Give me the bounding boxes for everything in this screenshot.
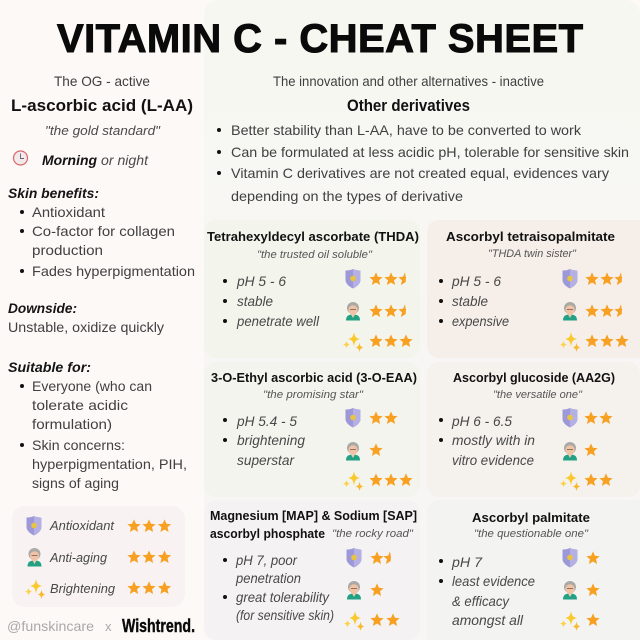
legend: Antioxidant <box>49 519 115 533</box>
text: morning or night: or night <box>101 152 149 168</box>
panel background: other derivatives <box>204 0 640 640</box>
card: ascorbyl tetraisopalmitate: Ascorbyl tetraisopalmitate <box>446 230 615 244</box>
card: AA2G: vitro evidence <box>452 452 534 468</box>
card: THDA: penetrate well <box>236 313 320 329</box>
card: MAP and SAP: ascorbyl phosphate <box>210 527 325 541</box>
list: skin benefits: Fades hyperpigmentation <box>32 263 195 279</box>
card: MAP and SAP: penetration <box>235 570 301 586</box>
list: derivatives overview: Better stability than L-AA, have to be converted to work <box>231 122 582 138</box>
card: ascorbyl tetraisopalmitate: pH 5 - 6 <box>451 273 501 289</box>
card: ascorbyl palmitate: & efficacy <box>452 593 510 609</box>
card: THDA: pH 5 - 6 <box>236 273 286 289</box>
list: derivatives overview: Can be formulated at less acidic pH, tolerable for sensitive skin <box>231 144 629 160</box>
card: ascorbyl palmitate: least evidence <box>452 573 535 589</box>
list: suitable for: signs of aging <box>32 475 119 491</box>
credit: Wishtrend. <box>122 616 195 636</box>
credit: x <box>105 619 112 634</box>
card: AA2G: pH 6 - 6.5 <box>451 413 512 429</box>
card: 3-O-EAA: "the promising star" <box>263 389 364 401</box>
panel: L-ascorbic acid <box>7 73 195 636</box>
card: MAP and SAP <box>204 500 420 640</box>
card: 3-O-EAA: 3-O-Ethyl ascorbic acid (3-O-EAA) <box>211 371 417 385</box>
credit: @funskincare <box>7 618 94 634</box>
card: THDA <box>204 220 420 358</box>
card: ascorbyl palmitate: Ascorbyl palmitate <box>472 511 590 525</box>
icon: clock <box>14 151 28 165</box>
card: ascorbyl tetraisopalmitate <box>427 220 640 358</box>
list: suitable for: formulation) <box>32 416 112 432</box>
heading: suitable for: Suitable for: <box>8 359 91 375</box>
card: ascorbyl palmitate: amongst all <box>452 612 524 628</box>
heading: skin benefits: Skin benefits: <box>8 185 99 201</box>
card: MAP and SAP: Magnesium [MAP] & Sodium [SAP] <box>210 509 417 523</box>
title: VITAMIN C - CHEAT SHEET <box>57 17 583 61</box>
card: MAP and SAP: pH 7, poor <box>235 552 298 568</box>
legend: Brightening <box>50 582 115 596</box>
intro: other derivatives <box>217 73 629 204</box>
list: derivatives overview: depending on the types of derivative <box>231 188 463 204</box>
card: 3-O-EAA: pH 5.4 - 5 <box>236 413 297 429</box>
card: ascorbyl tetraisopalmitate: expensive <box>452 313 509 329</box>
heading: downside: Downside: <box>8 300 77 316</box>
card: AA2G: Ascorbyl glucoside (AA2G) <box>453 371 615 385</box>
legend <box>12 506 185 607</box>
card: AA2G: mostly with in <box>452 432 535 448</box>
text: morning or night: Morning <box>42 152 97 168</box>
card: MAP and SAP: "the rocky road" <box>332 528 414 540</box>
card: ascorbyl tetraisopalmitate: stable <box>452 293 488 309</box>
list: derivatives overview <box>217 122 629 204</box>
list: suitable for: hyperpigmentation, PIH, <box>32 456 187 472</box>
card: ascorbyl palmitate: "the questionable one" <box>474 528 589 540</box>
text: morning or night <box>42 152 149 168</box>
text: downside: Unstable, oxidize quickly <box>8 319 164 335</box>
legend: Anti-aging <box>49 551 107 565</box>
card: AA2G <box>427 362 640 497</box>
list: suitable for: Skin concerns: <box>32 437 125 453</box>
card: 3-O-EAA: brightening <box>237 432 305 448</box>
list: suitable for: Everyone (who can <box>32 378 152 394</box>
credit <box>7 616 195 636</box>
list: skin benefits <box>20 204 195 279</box>
quote: gold standard: "the gold standard" <box>45 124 161 138</box>
card: THDA: Tetrahexyldecyl ascorbate (THDA) <box>207 230 419 244</box>
list: skin benefits: production <box>32 242 103 258</box>
card: ascorbyl palmitate: pH 7 <box>451 554 483 570</box>
list: derivatives overview: Vitamin C derivatives are not created equal, evidences vary <box>231 165 609 181</box>
list: skin benefits: Co-factor for collagen <box>32 223 175 239</box>
card: 3-O-EAA: superstar <box>237 452 295 468</box>
list: skin benefits: Antioxidant <box>32 204 105 220</box>
heading: other derivatives: Other derivatives <box>347 96 470 115</box>
card: 3-O-EAA <box>204 362 420 497</box>
card: MAP and SAP: (for sensitive skin) <box>236 607 334 623</box>
card: AA2G: "the versatile one" <box>493 389 583 401</box>
card: ascorbyl tetraisopalmitate: "THDA twin sister" <box>488 248 577 260</box>
card: THDA: stable <box>237 293 273 309</box>
list: suitable for: tolerate acidic <box>32 397 128 413</box>
card: THDA: "the trusted oil soluble" <box>257 249 373 261</box>
heading: inactive label: The innovation and other alternatives - inactive <box>273 73 544 89</box>
heading: active label: The OG - active <box>54 73 150 89</box>
heading: L-ascorbic acid: L-ascorbic acid (L-AA) <box>11 96 193 115</box>
list: suitable for <box>20 378 187 491</box>
card: MAP and SAP: great tolerability <box>236 589 330 605</box>
card: ascorbyl palmitate <box>427 500 640 640</box>
